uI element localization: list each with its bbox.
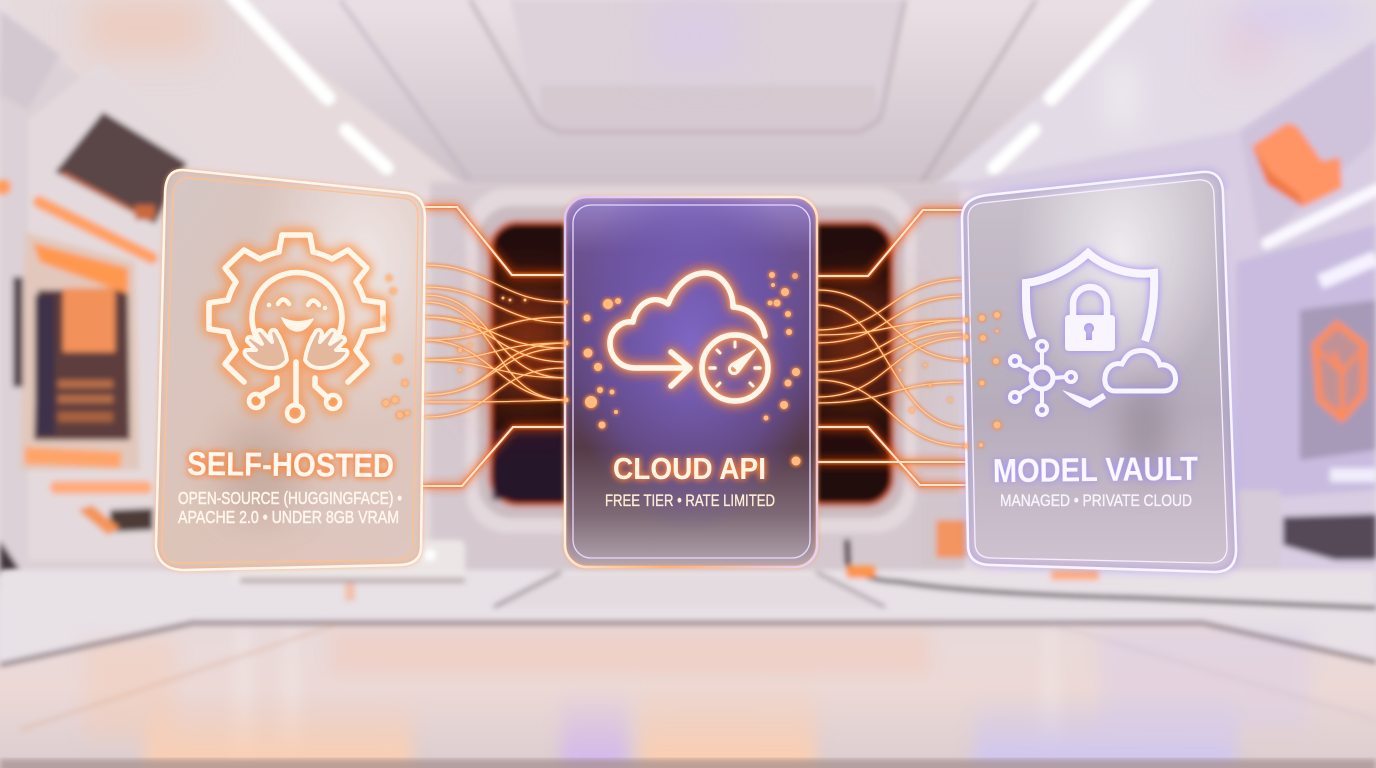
- text: free tier line: FREE TIER • RATE LIMITED: [605, 492, 775, 510]
- icon: gear with hugging face and circuit nodes: [209, 235, 383, 421]
- fiber streams: left: [425, 265, 566, 417]
- floor seams: [0, 623, 1376, 730]
- panel: self-hosted: [156, 170, 425, 570]
- icon: shield, lock, network and cloud: [1010, 253, 1176, 415]
- floor reflections: [85, 625, 1310, 768]
- right wall: [920, 40, 1376, 610]
- heading: cloud api: CLOUD API: [613, 451, 766, 486]
- ceiling lights: [233, 0, 1146, 168]
- fiber streams: right: [817, 279, 966, 446]
- upper floor: [0, 540, 1376, 665]
- text: license and vram line: APACHE 2.0 • UNDER 8GB VRAM: [178, 507, 399, 527]
- panel: model vault: [962, 172, 1236, 572]
- panel: cloud api: [565, 197, 817, 567]
- text: managed line: MANAGED • PRIVATE CLOUD: [1000, 491, 1192, 510]
- left wall: [0, 10, 205, 600]
- glow behind connectors: [490, 290, 892, 400]
- lower floor: [0, 622, 1376, 768]
- heading: model vault: MODEL VAULT: [993, 450, 1198, 489]
- ceiling tints: [85, 0, 1350, 130]
- icon: cloud with arrow and gauge: [610, 273, 768, 401]
- bottom floor edge: [0, 759, 1376, 768]
- heading: self-hosted: SELF-HOSTED: [187, 445, 394, 484]
- glowing particles: [382, 272, 1000, 466]
- circuit connectors: [422, 207, 968, 486]
- ceiling: [0, 0, 1376, 190]
- text: open-source line: OPEN-SOURCE (HUGGINGFACE) •: [178, 488, 402, 508]
- back wall and window: [430, 182, 960, 577]
